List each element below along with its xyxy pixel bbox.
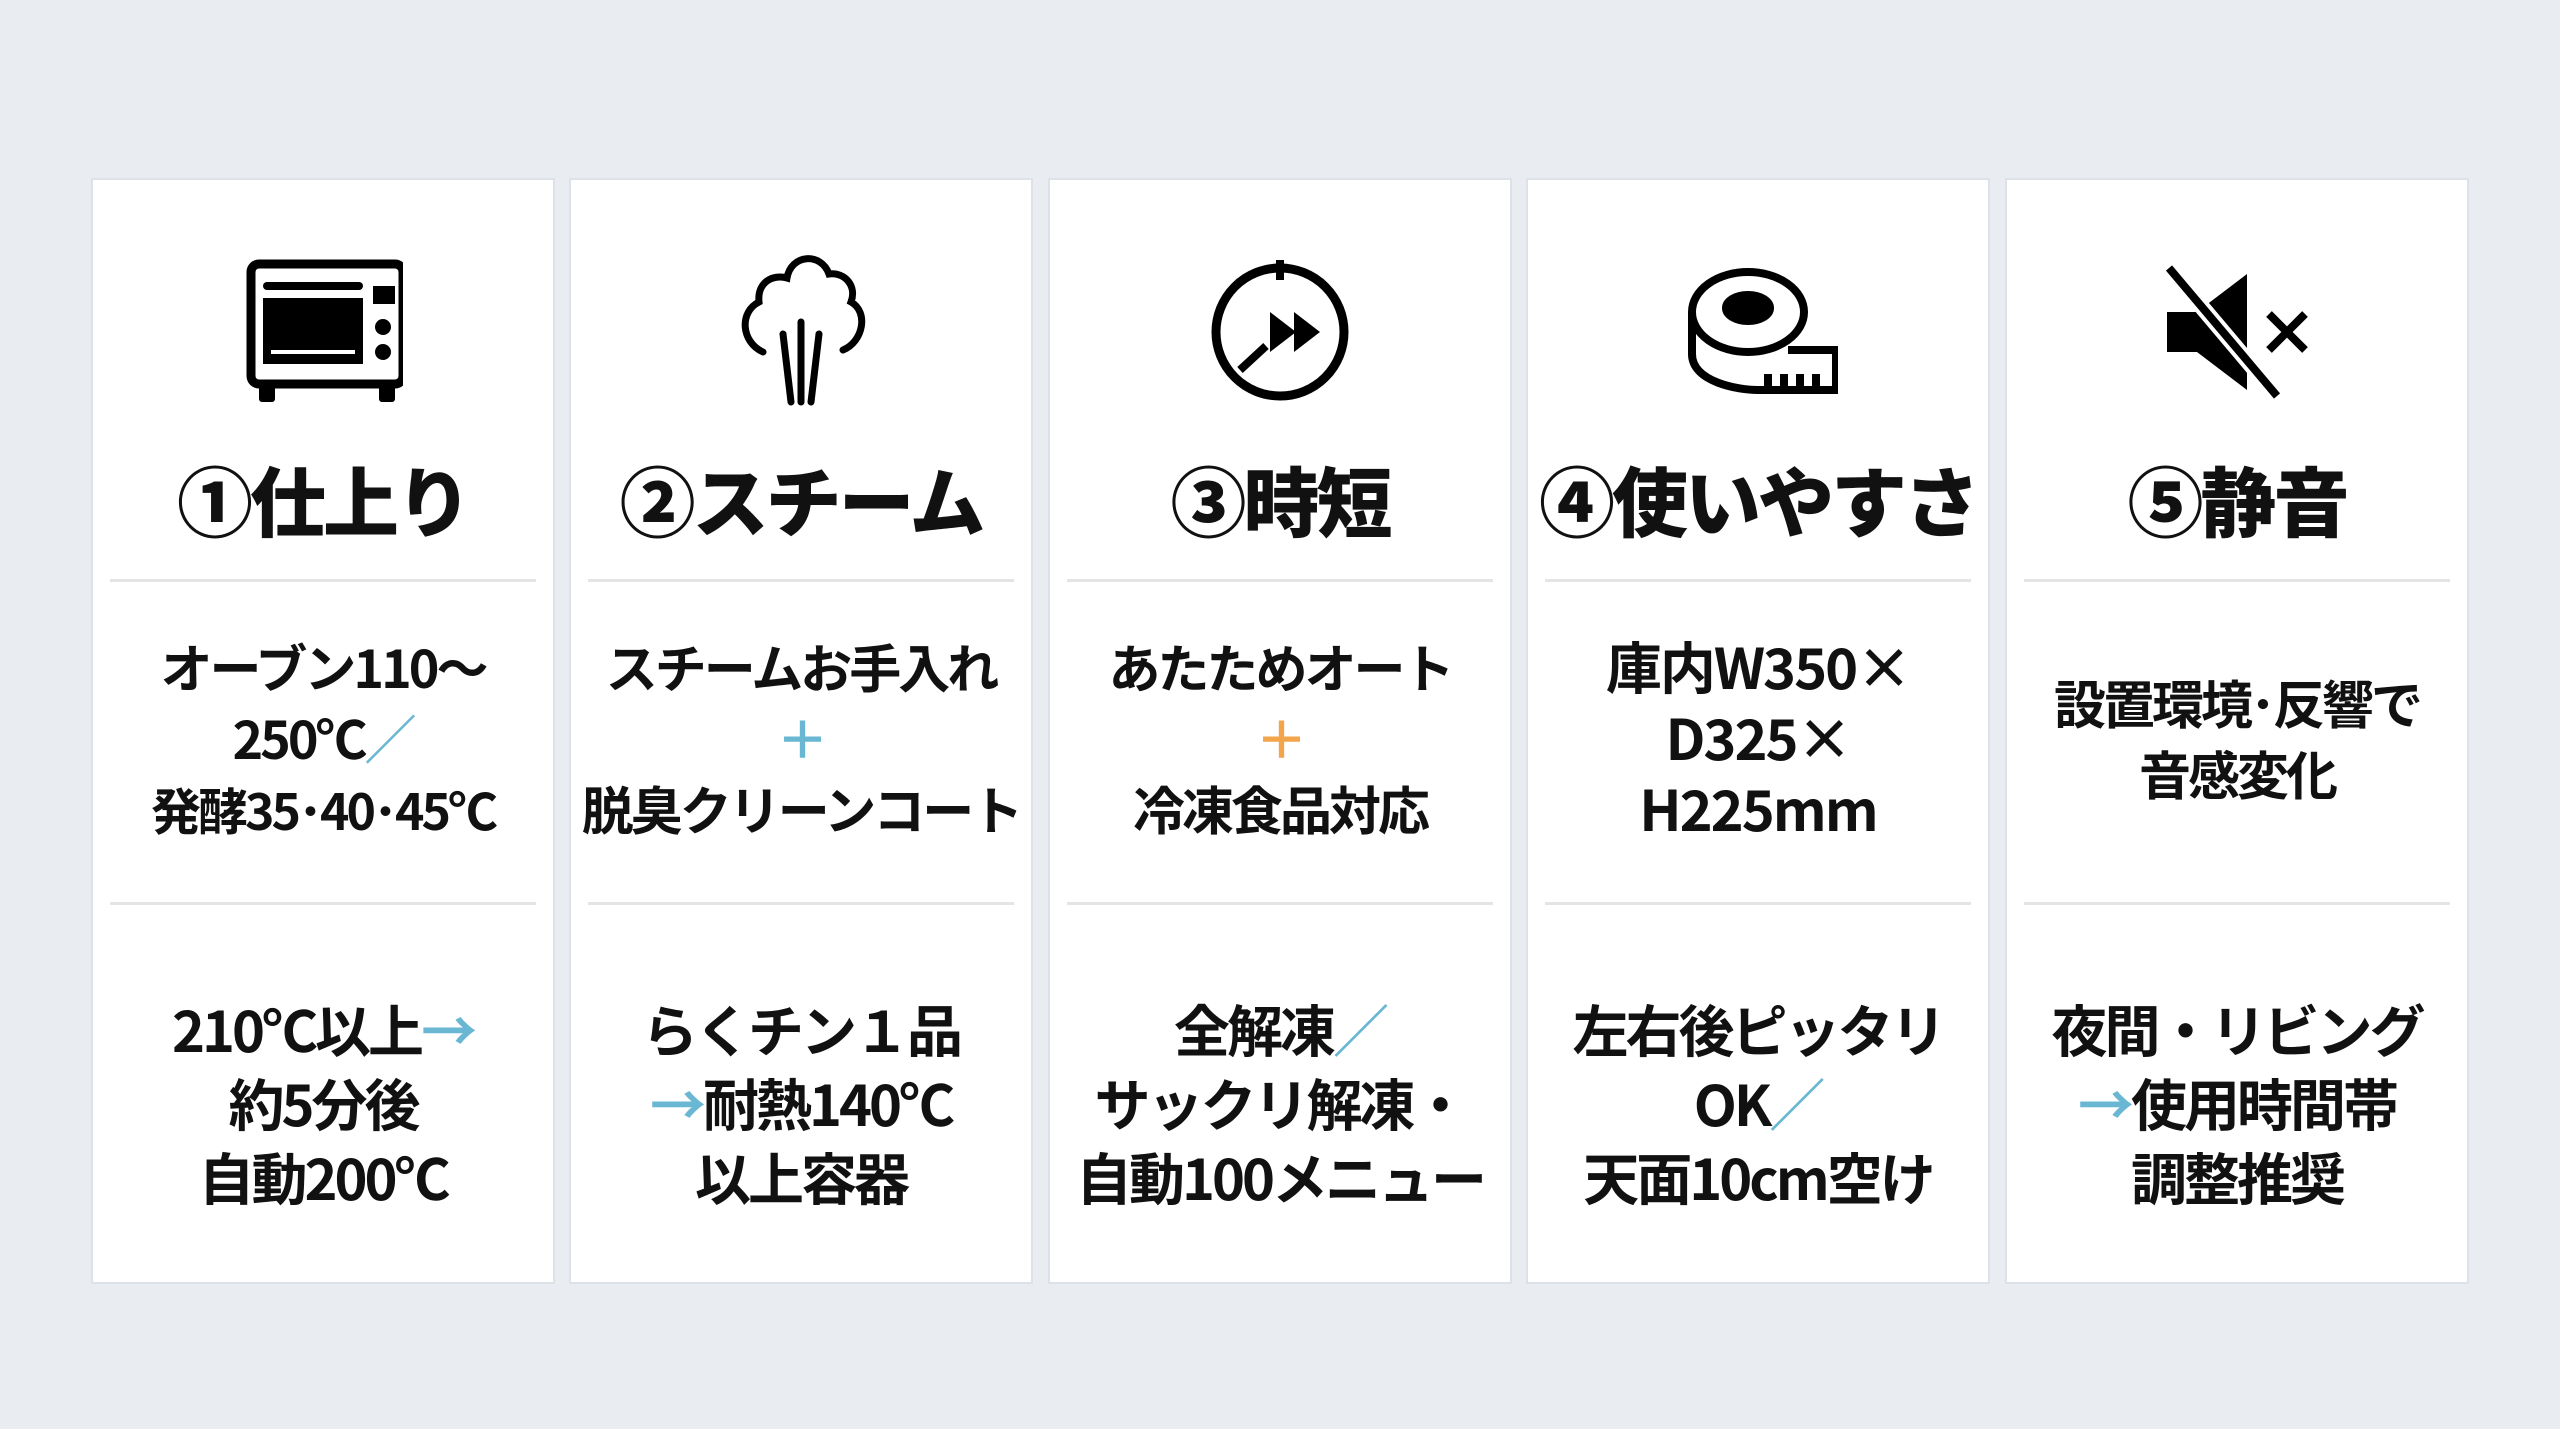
text: detail: 左右後ピッタリ bbox=[1572, 988, 1944, 1069]
title: ①仕上り bbox=[177, 443, 469, 553]
text: detail: →耐熱140℃ bbox=[650, 1062, 952, 1143]
text: spec: 脱臭クリーンコート bbox=[582, 770, 1020, 845]
panel: 仕上り bbox=[93, 180, 553, 1282]
panel: 静音 bbox=[2007, 180, 2467, 1282]
icon: oven bbox=[246, 260, 403, 402]
icon: steam bbox=[742, 255, 866, 406]
title: ③時短 bbox=[1170, 443, 1390, 553]
title: ②スチーム bbox=[620, 443, 982, 553]
text: spec: 冷凍食品対応 bbox=[1133, 770, 1427, 845]
text: spec: ＋ bbox=[1255, 699, 1304, 774]
text: spec bbox=[1108, 628, 1452, 845]
text: detail: 約5分後 bbox=[228, 1062, 418, 1143]
text: spec bbox=[582, 628, 1020, 845]
text: detail bbox=[642, 988, 960, 1217]
text: detail: サックリ解凍・ bbox=[1094, 1062, 1466, 1143]
text: detail bbox=[2052, 988, 2424, 1217]
icon: measuring tape bbox=[1688, 268, 1838, 394]
panel: 使いやすさ bbox=[1528, 180, 1988, 1282]
text: spec: H225mm bbox=[1639, 767, 1877, 848]
text: detail: 自動200℃ bbox=[198, 1136, 448, 1217]
text: spec bbox=[151, 628, 497, 845]
text: detail: OK／ bbox=[1694, 1062, 1822, 1143]
icon: fast-forward clock bbox=[1212, 260, 1348, 400]
text: detail: 210℃以上→ bbox=[172, 988, 474, 1069]
text: spec: あたためオート bbox=[1108, 628, 1452, 703]
text: detail: 夜間・リビング bbox=[2052, 988, 2422, 1069]
icon: mute speaker bbox=[2166, 265, 2308, 399]
text: spec: 発酵35･40･45℃ bbox=[151, 773, 495, 845]
title: ④使いやすさ bbox=[1539, 443, 1977, 553]
text: detail: 以上容器 bbox=[695, 1136, 907, 1217]
text: spec: 250℃／ bbox=[232, 699, 414, 774]
text: spec: D325× bbox=[1665, 696, 1851, 777]
text: detail: 調整推奨 bbox=[2131, 1136, 2343, 1217]
text: detail: 全解凍／ bbox=[1174, 988, 1386, 1069]
title: ⑤静音 bbox=[2128, 443, 2346, 553]
text: spec bbox=[1606, 625, 1910, 848]
text: detail: らくチン１品 bbox=[642, 988, 960, 1069]
text: spec: 音感変化 bbox=[2139, 735, 2335, 810]
text: spec: オーブン110～ bbox=[161, 628, 485, 703]
text: detail: 自動100メニュー bbox=[1076, 1136, 1484, 1217]
text: detail bbox=[172, 988, 476, 1217]
panel: スチーム bbox=[571, 180, 1031, 1282]
text: detail: 天面10cm空け bbox=[1583, 1136, 1933, 1217]
text: spec: スチームお手入れ bbox=[606, 628, 996, 703]
text: spec: ＋ bbox=[776, 699, 826, 774]
text: spec: 設置環境･反響で bbox=[2054, 664, 2420, 739]
text: detail bbox=[1076, 988, 1484, 1217]
text: spec: 庫内W350× bbox=[1606, 625, 1910, 706]
text: spec bbox=[2054, 664, 2420, 810]
panel: 時短 bbox=[1050, 180, 1510, 1282]
text: detail bbox=[1572, 988, 1944, 1217]
text: detail: →使用時間帯 bbox=[2078, 1062, 2396, 1143]
